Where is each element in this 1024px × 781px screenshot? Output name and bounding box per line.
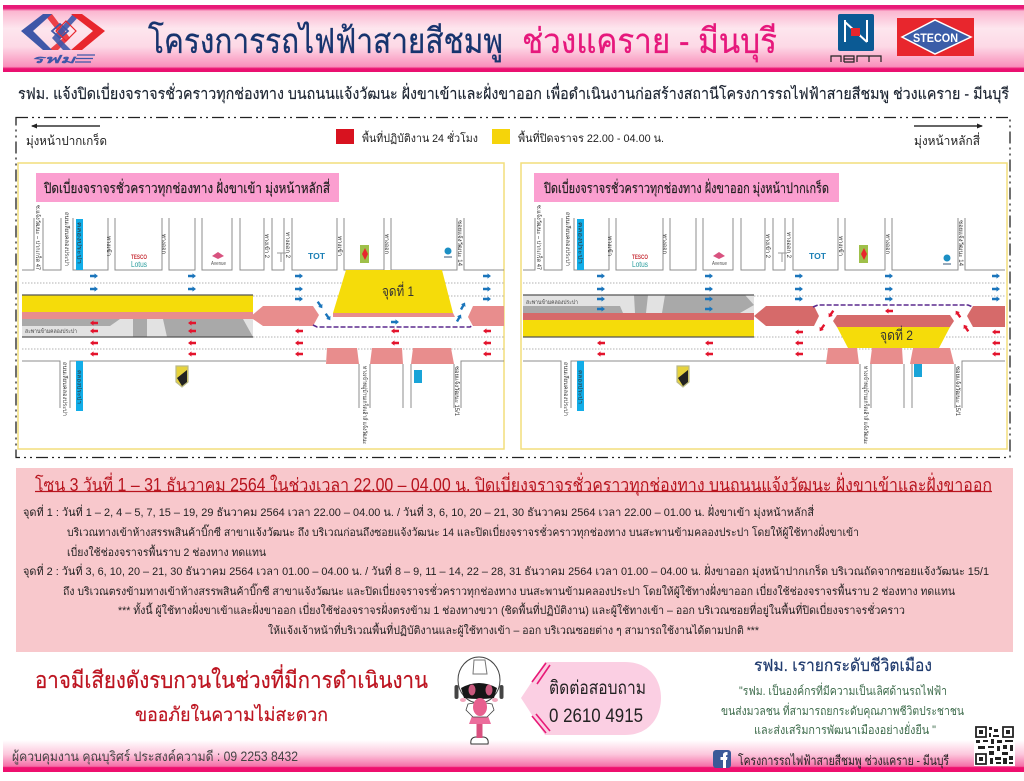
footer bar xyxy=(3,740,1024,772)
details text: *** ทั้งนี้ ผู้ใช้ทางฝั่งขาเข้าและฝั่งขาออก เบี่ยงใช้ช่องจราจรฝั่งตรงข้าม 1 ช่องทางขวา (ชิดพื้นที่ปฏิบัติงาน) และผู้ใช้ทางเข้า – ออก บริเวณซอยที่อยู่ในพื้นที่ปิดเบี่ยงจราจรชั่วคราว xyxy=(118,602,905,617)
landmarks: TESCO xyxy=(632,255,648,261)
logo: STECON xyxy=(897,18,974,56)
street labels: ซอยแจ้งวัฒนะ 15/1 xyxy=(954,366,961,417)
street labels: ทางออก 2 xyxy=(785,232,791,259)
panel heading xyxy=(534,173,839,202)
landmarks: TOT xyxy=(809,252,826,261)
canal xyxy=(577,219,584,411)
title highlight: ช่วงแคราย - มีนบุรี xyxy=(522,22,777,62)
pink work zones xyxy=(250,306,504,364)
street labels: ทางเข้า 2 xyxy=(263,234,270,259)
details text: จุดที่ 1 : วันที่ 1 – 2, 4 – 5, 7, 15 – 19, 29 ธันวาคม 2564 เวลา 22.00 – 04.00 น. / วันที่ 3, 6, 10, 20 – 21, 30 ธันวาคม 2564 เวลา 22.00 – 01.00 น. ฝั่งขาเข้า มุ่งหน้าหลักสี่ xyxy=(23,504,814,519)
street labels: ทางเข้าหมู่บ้านเกร็ดเฮ้าส์ แจ้งวัฒนะ xyxy=(361,366,370,444)
QR code xyxy=(974,725,1015,766)
title: โครงการรถไฟฟ้าสายสีชมพู xyxy=(148,21,503,62)
logo: MRTA xyxy=(21,14,105,66)
details text: จุดที่ 2 : วันที่ 3, 6, 10, 20 – 21, 30 ธันวาคม 2564 เวลา 01.00 – 04.00 น. / วันที่ 8 – 9, 11 – 14, 22 – 28, 31 ธันวาคม 2564 เวลา 01.00 – 04.00 น. ฝั่งขาออก มุ่งหน้าปากเกร็ด บริเวณถัดจากซอยแจ้งวัฒนะ 15/1 xyxy=(23,563,989,578)
landmarks xyxy=(632,245,951,387)
zone 1 xyxy=(333,270,455,317)
side streets xyxy=(523,218,1005,408)
closed viaduct band: สะพานข้ามคลองประปา xyxy=(25,328,77,335)
red work zones xyxy=(754,306,1005,327)
contact callout: ติดต่อสอบถาม xyxy=(549,678,646,699)
details text: บริเวณทางเข้าห้างสรรพสินค้าบิ๊กซี สาขาแจ้งวัฒนะ ถึง บริเวณก่อนถึงซอยแจ้งวัฒนะ 14 และปิดเบี่ยงจราจรชั่วคราวทุกช่องทาง บนสะพานข้ามคลองประปา โดยให้ผู้ใช้ทางฝั่งขาเข้า xyxy=(67,524,859,539)
noise apology: ขออภัยในความไม่สะดวก xyxy=(135,704,328,726)
street labels: ซอยแจ้งวัฒนะ 15/1 xyxy=(453,366,460,417)
panel: outbound closure map xyxy=(521,163,1007,449)
detour route xyxy=(313,325,473,327)
panel: inbound closure map xyxy=(18,163,504,449)
closed viaduct band xyxy=(523,295,754,337)
landmarks: Lotus xyxy=(632,260,648,269)
MRTA vision: รฟม. เรายกระดับชีวิตเมือง xyxy=(754,656,932,675)
street labels: ซ.แจ้งวัฒนะ – ปากเกร็ด 47 xyxy=(34,205,43,271)
map frame xyxy=(16,118,1010,458)
street labels: ทางเข้าหมู่บ้านเกร็ดเฮ้าส์ แจ้งวัฒนะ xyxy=(862,366,871,444)
street labels: ทางเข้า 2 xyxy=(764,234,771,259)
supervisor contact: ผู้ควบคุมงาน คุณบุริศร์ ประสงค์ความดี : 09 2253 8432 xyxy=(12,748,298,765)
street labels: คลองประปา xyxy=(576,370,584,404)
landmarks xyxy=(131,245,452,387)
mascot xyxy=(454,657,504,744)
MRTA vision xyxy=(721,656,964,737)
logo: MRTA: รฟม xyxy=(31,54,79,66)
header banner xyxy=(3,5,1024,72)
zone 2 xyxy=(837,326,950,348)
landmarks: TOT xyxy=(308,252,325,261)
logo: NBM xyxy=(831,14,881,62)
closed viaduct band: สะพานข้ามคลองประปา xyxy=(526,299,578,306)
MRTA vision: "รฟม. เป็นองค์กรที่มีความเป็นเลิศด้านรถไฟฟ้า xyxy=(739,682,947,698)
landmarks: Lotus xyxy=(131,260,147,269)
panel heading: ปิดเบี่ยงจราจรชั่วคราวทุกช่องทาง ฝั่งขาออก มุ่งหน้าปากเกร็ด xyxy=(544,179,829,197)
arrow: toward Lak Si: มุ่งหน้าหลักสี่ xyxy=(914,132,980,149)
side street zones xyxy=(826,348,954,364)
panel heading: ปิดเบี่ยงจราจรชั่วคราวทุกช่องทาง ฝั่งขาเข้า มุ่งหน้าหลักสี่ xyxy=(44,179,330,197)
arrow: toward Pak Kret xyxy=(26,124,107,149)
facebook link: โครงการรถไฟฟ้าสายสีชมพู ช่วงแคราย - มีนบุรี xyxy=(738,753,949,769)
contact callout: 0 2610 4915 xyxy=(549,706,643,727)
street labels: ทางออก xyxy=(383,234,389,254)
landmarks: Avenue xyxy=(211,261,226,267)
street labels: คลองประปา xyxy=(576,222,584,264)
street labels: ทางเข้า xyxy=(837,236,844,256)
lane lines xyxy=(523,283,1005,349)
panel heading xyxy=(36,173,339,202)
canal xyxy=(76,219,83,411)
legend: พื้นที่ปิดจราจร 22.00 - 04.00 น. xyxy=(518,130,664,145)
street labels: ทางออก 2 xyxy=(284,232,290,259)
details text: ให้แจ้งเจ้าหน้าที่บริเวณพื้นที่ปฏิบัติงานและผู้ใช้ทางเข้า – ออก บริเวณซอยต่าง ๆ สามารถใช้งานได้ตามปกติ *** xyxy=(268,622,760,637)
contact callout xyxy=(521,662,661,735)
MRTA vision: และส่งเสริมการพัฒนาเมืองอย่างยั่งยืน " xyxy=(754,721,936,737)
logo: STECON: STECON xyxy=(913,31,958,45)
lane lines xyxy=(22,283,504,349)
street labels xyxy=(34,205,463,444)
street labels: ซอยแจ้งวัฒนะ 14 xyxy=(957,220,964,267)
street labels: ทางเข้า xyxy=(336,236,343,256)
street labels: ถนนเลียบคลองประปา xyxy=(562,362,570,416)
arrow: toward Lak Si xyxy=(914,124,983,149)
zone 1: จุดที่ 1 xyxy=(382,282,414,300)
closed viaduct band xyxy=(22,295,253,337)
facebook link xyxy=(713,750,949,769)
landmarks: Avenue xyxy=(712,261,727,267)
details text xyxy=(23,504,989,637)
street labels: ทางเข้า xyxy=(105,236,112,256)
street labels: ทางออก xyxy=(160,234,166,254)
landmarks: TESCO xyxy=(131,255,147,261)
side streets xyxy=(22,218,504,408)
zone 2: จุดที่ 2 xyxy=(880,326,913,344)
detour route xyxy=(813,305,973,307)
traffic arrows xyxy=(597,273,1000,357)
street labels: ทางเข้า xyxy=(606,236,613,256)
noise apology: อาจมีเสียงดังรบกวนในช่วงที่มีการดำเนินงาน xyxy=(35,664,428,693)
MRTA vision: ขนส่งมวลชน ที่สามารถยกระดับคุณภาพชีวิตประชาชน xyxy=(721,702,964,719)
street labels: ทางออก xyxy=(661,234,667,254)
street labels: ซ.แจ้งวัฒนะ – ปากเกร็ด 47 xyxy=(535,205,544,271)
street labels: คลองประปา xyxy=(76,222,82,264)
street labels: ทางออก xyxy=(884,234,890,254)
street labels: ซอยแจ้งวัฒนะ 14 xyxy=(456,220,463,267)
arrow: toward Pak Kret: มุ่งหน้าปากเกร็ด xyxy=(26,133,107,149)
legend xyxy=(336,129,664,145)
panel: closure details xyxy=(16,468,1013,652)
noise apology xyxy=(35,664,428,726)
street labels: คลองประปา xyxy=(76,370,82,404)
details text: เบี่ยงใช้ช่องจราจรพื้นราบ 2 ช่องทาง ทดแทน xyxy=(67,544,266,559)
details text: ถึง บริเวณตรงข้ามทางเข้าห้างสรรพสินค้าบิ๊กซี สาขาแจ้งวัฒนะ และปิดเบี่ยงจราจรชั่วคราวทุกช่องทาง บนสะพานข้ามคลองประปา โดยให้ผู้ใช้ทางฝั่งขาออก เบี่ยงใช้ช่องจราจรพื้นราบ 2 ช่องทาง ทดแทน xyxy=(63,583,955,598)
traffic arrows xyxy=(90,273,491,357)
legend: พื้นที่ปฏิบัติงาน 24 ชั่วโมง xyxy=(362,130,478,145)
street labels: ถนนเลียบคลองประปา xyxy=(61,362,69,416)
street labels: ถนนเลียบคลองประปา xyxy=(564,212,572,266)
street labels: ถนนเลียบคลองประปา xyxy=(63,212,71,266)
street labels xyxy=(535,205,964,444)
